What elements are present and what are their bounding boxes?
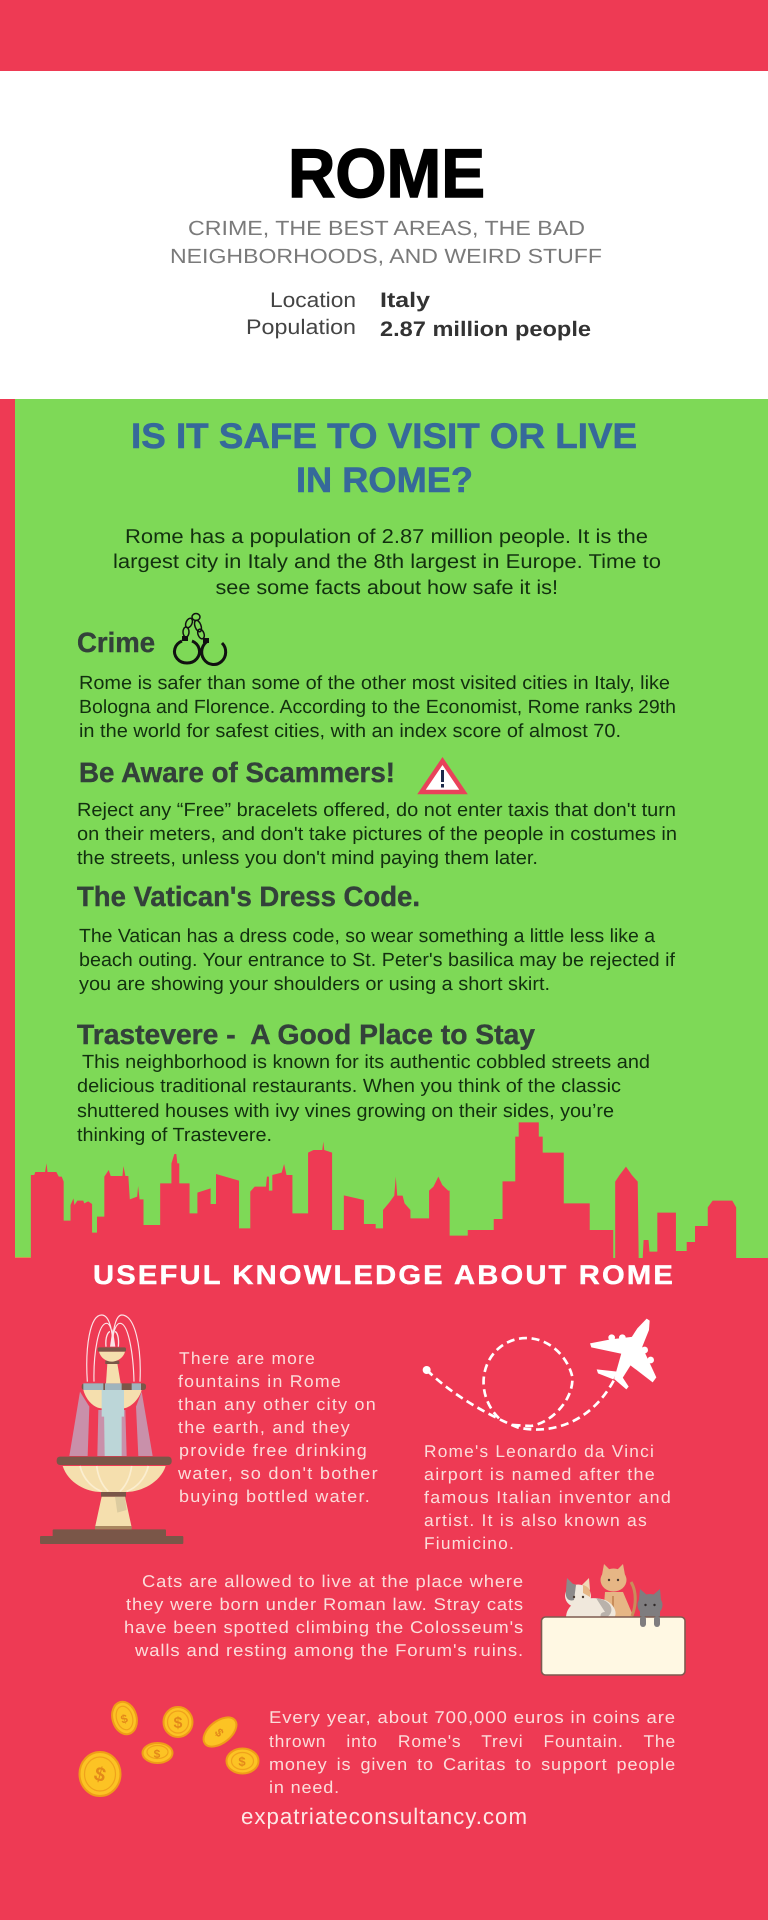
heading: scammers: Be Aware of Scammers! (79, 757, 395, 788)
panel: is it safe (15, 399, 768, 1259)
text: coins: thrown into Rome's Trevi Fountain. The (269, 1732, 676, 1751)
text: scammers: the streets, unless you don't mind paying them later. (77, 848, 538, 869)
text: cats (124, 1572, 524, 1660)
text: crime: Bologna and Florence. According to the Economist, Rome ranks 29th (79, 697, 676, 718)
text: fountains: than any other city on (178, 1395, 377, 1414)
text: crime (79, 673, 676, 742)
calico cat (565, 1578, 616, 1619)
icon: gold coins: $ (119, 1711, 130, 1727)
text: trastevere: delicious traditional restaurants. When you think of the classic (77, 1076, 621, 1097)
panel: header (0, 71, 768, 399)
text: trastevere: This neighborhood is known for its authentic cobbled streets and (82, 1052, 650, 1073)
icon: gold coins: $ (212, 1726, 227, 1740)
main heading: IS IT SAFE TO VISIT OR LIVE (131, 416, 637, 456)
intro paragraph: see some facts about how safe it is! (216, 577, 558, 599)
text: coins (269, 1708, 676, 1797)
main heading (131, 416, 637, 500)
text: airport: artist. It is also known as (424, 1511, 648, 1530)
text: airport: airport is named after the (424, 1465, 656, 1484)
icon: cats on a sign (542, 1564, 685, 1675)
panel: useful knowledge (0, 1258, 768, 1920)
text: dress code (79, 926, 676, 995)
text: cats: Cats are allowed to live at the place where (142, 1572, 524, 1591)
text: dress code: The Vatican has a dress code, so wear something a little less like a (79, 926, 655, 947)
subtitle: CRIME, THE BEST AREAS, THE BAD (188, 217, 585, 240)
text: airport: famous Italian inventor and (424, 1488, 672, 1507)
icon: gold coins: $ (174, 1715, 183, 1732)
text: fountains: provide free drinking (179, 1441, 368, 1460)
sign board (542, 1617, 685, 1675)
text: fountains: buying bottled water. (179, 1487, 371, 1506)
heading: crime: Crime (77, 627, 155, 658)
text: dress code: you are showing your shoulders or using a short skirt. (79, 974, 550, 995)
text: scammers: Reject any “Free” bracelets offered, do not enter taxis that don't turn (77, 800, 676, 821)
intro paragraph: largest city in Italy and the 8th largest in Europe. Time to (113, 551, 661, 573)
icon: airplane with dashed flight path (423, 1319, 656, 1430)
text: fountains: water, so don't bother (177, 1464, 379, 1483)
icon: gold coins: $ (154, 1747, 161, 1761)
illustration: city skyline (31, 1122, 736, 1260)
text: coins: in need. (269, 1778, 340, 1797)
text: crime: in the world for safest cities, with an index score of almost 70. (79, 721, 621, 742)
location and population facts: Italy (380, 289, 430, 312)
text: fountains (177, 1349, 379, 1506)
text: fountains: fountains in Rome (178, 1372, 342, 1391)
text: crime: Rome is safer than some of the other most visited cities in Italy, like (79, 673, 670, 694)
orange cat (600, 1564, 635, 1618)
text: cats: walls and resting among the Forum's ruins. (134, 1641, 524, 1660)
text: scammers (77, 800, 677, 869)
text: airport: Fiumicino. (424, 1534, 515, 1553)
text: coins: money is given to Caritas to support people (269, 1755, 676, 1774)
heading: useful knowledge: USEFUL KNOWLEDGE ABOUT ROME (93, 1260, 675, 1290)
intro paragraph: Rome has a population of 2.87 million people. It is the (125, 526, 648, 548)
text: airport (424, 1442, 672, 1553)
location and population facts: Location (270, 289, 356, 312)
icon: warning triangle (422, 761, 464, 792)
text: fountains: There are more (179, 1349, 316, 1368)
icon: gold coins: $ (92, 1763, 108, 1787)
location and population facts: 2.87 million people (380, 318, 591, 341)
text: coins: Every year, about 700,000 euros in coins are (269, 1708, 676, 1727)
main heading: IN ROME? (296, 460, 473, 500)
text: trastevere (77, 1052, 650, 1146)
title: ROME (288, 135, 485, 212)
top red band (0, 0, 768, 71)
location and population facts (246, 289, 591, 341)
intro paragraph (113, 526, 661, 599)
text: dress code: beach outing. Your entrance to St. Peter's basilica may be rejected if (79, 950, 676, 971)
icon: handcuffs (174, 614, 226, 665)
heading: trastevere: Trastevere - A Good Place to Stay (77, 1019, 535, 1050)
heading: dress code: The Vatican's Dress Code. (77, 881, 420, 912)
grey cat (638, 1589, 662, 1618)
text: fountains: the earth, and they (178, 1418, 351, 1437)
text: trastevere: thinking of Trastevere. (77, 1125, 272, 1146)
icon: gold coins (80, 1699, 258, 1796)
text: airport: Rome's Leonardo da Vinci (424, 1442, 655, 1461)
icon: gold coins: $ (238, 1754, 246, 1769)
text: trastevere: shuttered houses with ivy vines growing on their sides, you’re (77, 1101, 614, 1122)
location and population facts: Population (246, 316, 356, 339)
subtitle (170, 217, 602, 268)
text: scammers: on their meters, and don't take pictures of the people in costumes in (77, 824, 677, 845)
subtitle: NEIGHBORHOODS, AND WEIRD STUFF (170, 245, 602, 268)
text: cats: have been spotted climbing the Colosseum's (124, 1618, 524, 1637)
text: cats: they were born under Roman law. Stray cats (126, 1595, 524, 1614)
footer website: expatriateconsultancy.com (241, 1804, 528, 1829)
icon: fountain (40, 1315, 183, 1544)
